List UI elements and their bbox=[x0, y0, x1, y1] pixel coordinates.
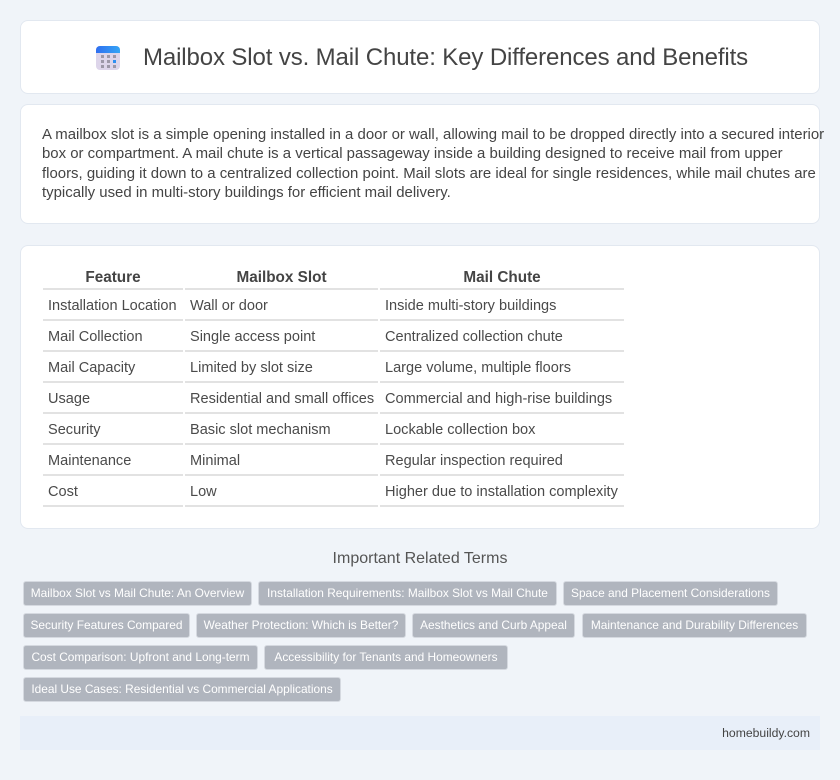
row: security: Lockable collection box bbox=[385, 422, 535, 438]
tag bbox=[23, 613, 190, 638]
tag bbox=[23, 581, 252, 606]
icon: mailbox calendar grid bbox=[96, 46, 120, 70]
row: installation location: Installation Location bbox=[48, 298, 177, 314]
tag bbox=[23, 677, 341, 702]
tag bbox=[23, 645, 258, 670]
row: usage: Usage bbox=[48, 391, 90, 407]
tag bbox=[264, 645, 508, 670]
row: mail collection bbox=[48, 329, 563, 345]
row: usage: Residential and small offices bbox=[190, 391, 374, 407]
intro text: typically used in multi-story buildings for efficient mail delivery. bbox=[42, 184, 451, 201]
row: cost: Cost bbox=[48, 484, 78, 500]
tag: Weather Protection: Which is Better? bbox=[204, 618, 398, 632]
footer bar bbox=[20, 716, 820, 750]
related term tags bbox=[23, 581, 807, 702]
column headers: Feature bbox=[85, 269, 141, 286]
row: mail capacity bbox=[48, 360, 571, 376]
tag bbox=[412, 613, 575, 638]
row: maintenance: Maintenance bbox=[48, 453, 131, 469]
footer source: homebuildy.com bbox=[722, 726, 810, 740]
intro text bbox=[42, 126, 824, 201]
tag: Mailbox Slot vs Mail Chute: An Overview bbox=[31, 586, 244, 600]
tag bbox=[582, 613, 807, 638]
row: mail capacity: Large volume, multiple floors bbox=[385, 360, 571, 376]
tag: Ideal Use Cases: Residential vs Commercial Applications bbox=[31, 682, 333, 696]
row: maintenance: Minimal bbox=[190, 453, 240, 469]
row: cost bbox=[48, 484, 618, 500]
row: cost: Higher due to installation complexity bbox=[385, 484, 618, 500]
intro text: A mailbox slot is a simple opening installed in a door or wall, allowing mail to be dropped directly into a secured interior bbox=[42, 126, 824, 143]
row: installation location: Wall or door bbox=[190, 298, 268, 314]
tag: Accessibility for Tenants and Homeowners bbox=[274, 650, 498, 664]
intro text: box or compartment. A mail chute is a vertical passageway inside a building designed to receive mail from upper bbox=[42, 145, 783, 162]
column headers: Mail Chute bbox=[463, 269, 541, 286]
row: usage bbox=[48, 391, 612, 407]
row: mail collection: Mail Collection bbox=[48, 329, 143, 345]
row: mail capacity: Mail Capacity bbox=[48, 360, 135, 376]
tag bbox=[563, 581, 778, 606]
related terms heading: Important Related Terms bbox=[333, 550, 507, 567]
panel: introduction bbox=[20, 104, 820, 224]
tag bbox=[196, 613, 406, 638]
comparison table bbox=[43, 269, 624, 507]
title: Mailbox Slot vs. Mail Chute: Key Differences and Benefits bbox=[143, 44, 748, 71]
tag: Aesthetics and Curb Appeal bbox=[420, 618, 567, 632]
row: installation location: Inside multi-story buildings bbox=[385, 298, 556, 314]
column headers bbox=[85, 269, 541, 286]
row: usage: Commercial and high-rise buildings bbox=[385, 391, 612, 407]
header panel bbox=[20, 20, 820, 94]
tag: Security Features Compared bbox=[30, 618, 182, 632]
tag: Space and Placement Considerations bbox=[571, 586, 770, 600]
intro text: floors, guiding it down to a centralized collection point. Mail slots are ideal for single residences, while mail chutes are bbox=[42, 165, 816, 182]
panel: comparison table bbox=[20, 245, 820, 529]
column headers: Mailbox Slot bbox=[236, 269, 327, 286]
row: maintenance: Regular inspection required bbox=[385, 453, 563, 469]
row: mail collection: Single access point bbox=[190, 329, 315, 345]
tag: Maintenance and Durability Differences bbox=[591, 618, 798, 632]
tag bbox=[258, 581, 557, 606]
tag: Cost Comparison: Upfront and Long-term bbox=[31, 650, 250, 664]
row: mail collection: Centralized collection chute bbox=[385, 329, 563, 345]
row: security bbox=[48, 422, 536, 438]
row: maintenance bbox=[48, 453, 563, 469]
row: security: Security bbox=[48, 422, 101, 438]
tag: Installation Requirements: Mailbox Slot vs Mail Chute bbox=[267, 586, 548, 600]
row: cost: Low bbox=[190, 484, 217, 500]
row: installation location bbox=[48, 298, 556, 314]
row: mail capacity: Limited by slot size bbox=[190, 360, 313, 376]
row: security: Basic slot mechanism bbox=[190, 422, 331, 438]
